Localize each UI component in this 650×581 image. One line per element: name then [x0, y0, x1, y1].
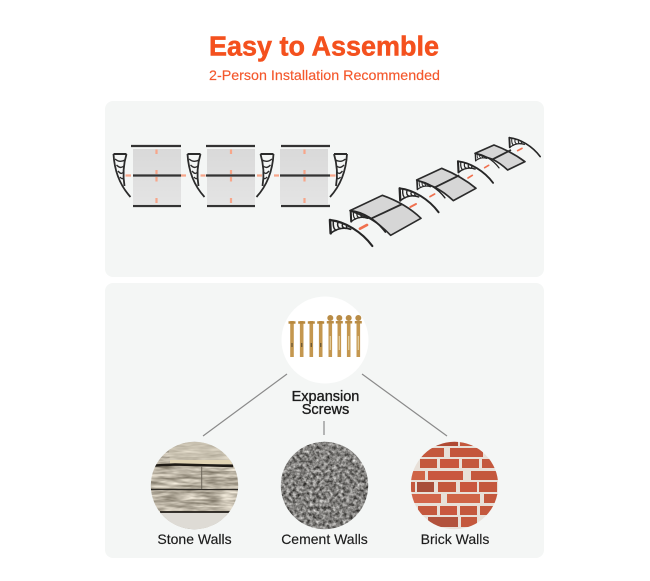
panel: assembly diagrams [105, 101, 544, 277]
title: Easy to Assemble [209, 30, 439, 62]
label: expansion screws [292, 389, 359, 418]
canopy section 2 [417, 168, 476, 201]
canopy panel 1 [131, 146, 181, 206]
icon: expansion screws [282, 296, 368, 384]
canopy panel 2 [206, 146, 255, 206]
label: expansion screws: Screws [302, 402, 349, 418]
infographic [105, 35, 544, 558]
label: stone walls: Stone Walls [157, 531, 232, 547]
orange arrows [126, 150, 336, 203]
photo: cement wall [280, 441, 370, 531]
photo: brick wall [410, 441, 500, 531]
label: brick walls: Brick Walls [421, 531, 489, 547]
canopy section 3 [475, 145, 525, 170]
orange arrows [360, 148, 522, 229]
panel: wall compatibility [105, 283, 544, 558]
canopy section 1 [350, 195, 421, 235]
label: cement walls: Cement Walls [281, 531, 368, 547]
connector lines [203, 374, 447, 436]
brackets [114, 154, 347, 197]
diagram: canopy assembly perspective [330, 138, 540, 246]
photo: stone wall [150, 441, 240, 532]
canopy brackets [330, 138, 540, 246]
diagram: flat canopy panels from above [114, 146, 347, 206]
subtitle: 2-Person Installation Recommended [209, 67, 440, 83]
canopy panel 3 [280, 146, 330, 206]
label: expansion screws: Expansion [292, 389, 359, 405]
